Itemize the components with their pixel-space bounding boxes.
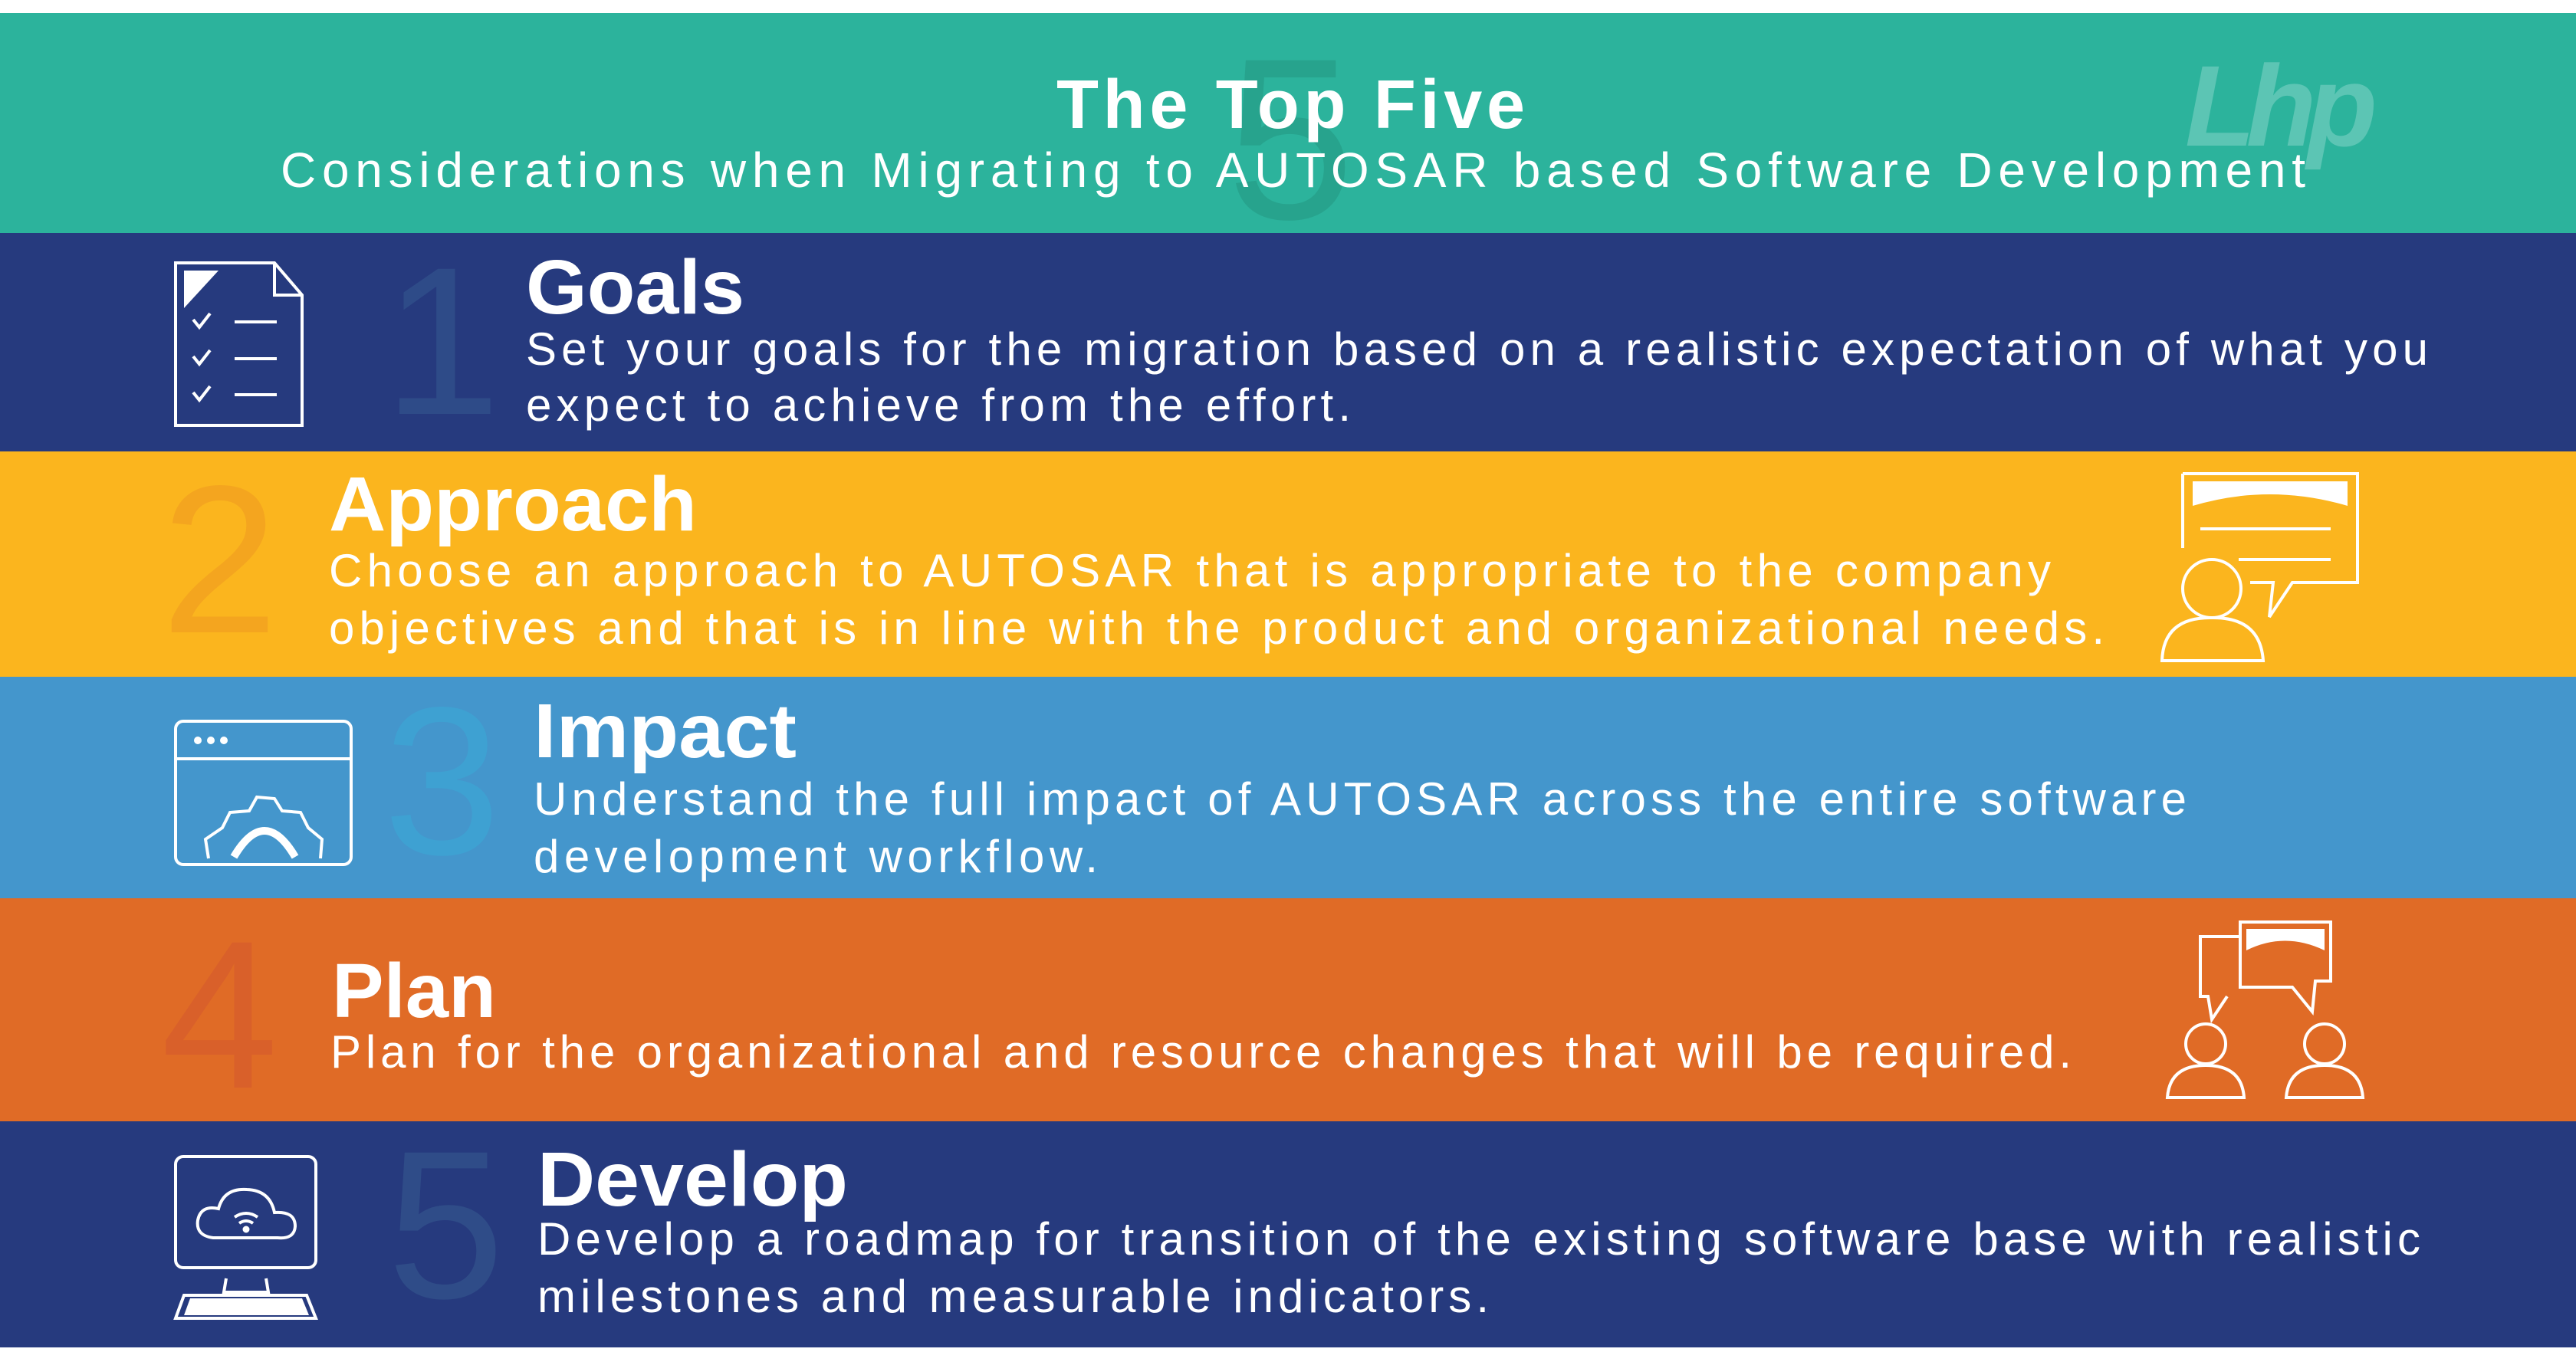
heading: Impact: Impact [534, 688, 797, 774]
panel: develop [0, 1108, 2576, 1347]
text: approach body [329, 545, 2104, 654]
text: goals body: expect to achieve from the effort. [526, 379, 1351, 431]
title: The Top Five [1056, 67, 1525, 143]
text: impact body: Understand the full impact of AUTOSAR across the entire software [534, 773, 2187, 825]
text: develop body [537, 1213, 2420, 1322]
text: impact body [534, 773, 2187, 882]
text: goals body: Set your goals for the migration based on a realistic expectation of what you [526, 323, 2428, 375]
logo: Lhp: Lhp [2185, 41, 2374, 170]
text: develop body: Develop a roadmap for transition of the existing software base with realistic [537, 1213, 2420, 1265]
panel: header [0, 10, 2576, 267]
decorative number 5 in header: 5 [1227, 10, 1355, 267]
panel: approach [0, 442, 2576, 678]
number 2: 2 [161, 442, 278, 678]
icon: two people talking [2167, 922, 2363, 1098]
heading: Plan: Plan [332, 948, 496, 1034]
number 5: 5 [387, 1108, 504, 1343]
panel: plan [0, 898, 2576, 1133]
panel: impact [0, 664, 2576, 899]
icon: browser window with gear [176, 721, 351, 865]
text: plan body: Plan for the organizational and resource changes that will be required. [330, 1026, 2072, 1078]
subtitle: Considerations when Migrating to AUTOSAR based Software Development [281, 143, 2305, 198]
heading: Goals: Goals [526, 244, 744, 330]
panel: goals [0, 224, 2576, 459]
text: approach body: Choose an approach to AUTOSAR that is appropriate to the company [329, 545, 2051, 596]
number 3: 3 [383, 664, 501, 899]
icon: checklist document [176, 263, 302, 425]
number 4: 4 [161, 898, 278, 1133]
text: impact body: development workflow. [534, 831, 1098, 882]
heading: Develop: Develop [537, 1137, 848, 1222]
text: goals body [526, 323, 2428, 431]
icon: presenter with speech board [2162, 474, 2358, 661]
text: approach body: objectives and that is in line with the product and organizational needs. [329, 602, 2104, 654]
text: develop body: milestones and measurable indicators. [537, 1271, 1489, 1322]
number 1: 1 [383, 224, 501, 459]
icon: monitor with cloud [176, 1157, 316, 1318]
heading: Approach: Approach [329, 461, 697, 547]
